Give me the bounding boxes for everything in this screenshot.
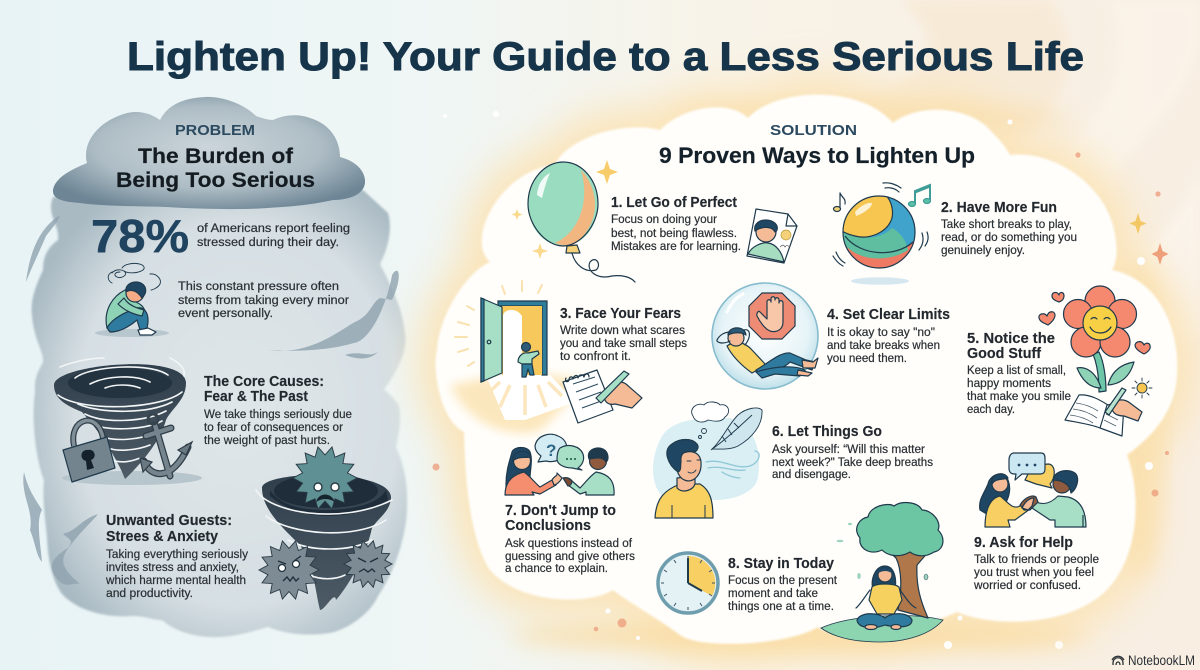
icon: two people talking: ? <box>546 441 556 460</box>
icon: man with thought bubble, feather and breeze <box>653 402 762 518</box>
icon: two people holding hands with speech bubbles <box>980 453 1086 527</box>
text: item 6 <box>772 424 933 481</box>
text: item 6: next week?" Take deep breaths <box>772 455 933 469</box>
text: item 7: a chance to explain. <box>505 561 608 575</box>
text: item 2: 2. Have More Fun <box>941 200 1057 216</box>
text: unwanted guests: Taking everything seriously <box>106 547 249 561</box>
text: item 8: Focus on the present <box>728 573 838 587</box>
text: americans stressed: of Americans report feeling <box>197 221 350 235</box>
text: item 3 <box>560 306 687 363</box>
text: item 5: 5. Notice the <box>967 331 1055 347</box>
text: item 6: 6. Let Things Go <box>772 424 882 440</box>
text: item 1 <box>611 195 741 253</box>
item 3: face your fears <box>450 281 687 434</box>
icon: balloon <box>512 160 635 282</box>
text: item 6: Ask yourself: “Will this matter <box>772 442 925 456</box>
cloud shape <box>436 95 1177 644</box>
text: item 1: Focus on doing your <box>611 212 717 226</box>
text: unwanted guests: Unwanted Guests: <box>106 513 232 529</box>
item 2: have more fun <box>833 183 1077 285</box>
text: americans stressed <box>197 221 350 249</box>
cloud body <box>32 190 407 637</box>
text: item 8: moment and take <box>728 586 818 600</box>
text: item 7: 7. Don't Jump to <box>505 503 616 519</box>
text: item 8: things one at a time. <box>728 599 834 613</box>
text: item 2: Take short breaks to play, <box>941 217 1072 231</box>
text: item 9: you trust when you feel <box>974 565 1094 579</box>
stat: 78 percent: 78% <box>91 210 189 262</box>
item 5: notice the good stuff <box>967 286 1152 436</box>
text: core causes: We take things seriously due <box>204 407 352 421</box>
heading: the burden of being too serious: Being Too Serious <box>116 168 315 192</box>
text: item 4 <box>827 307 950 365</box>
icon: smiling flower with hearts, sun and journal <box>1039 286 1152 436</box>
decorative dots and sparkles <box>432 111 1169 649</box>
item 7: don't jump to conclusions <box>505 434 635 575</box>
text: constant pressure <box>178 279 349 320</box>
text: constant pressure: stems from taking every minor <box>178 293 349 307</box>
text: item 2: read, or do something you <box>941 230 1077 244</box>
text: item 7: guessing and give others <box>505 549 635 563</box>
icon: imperfect portrait <box>747 209 797 263</box>
text: item 5: that make you smile <box>967 389 1071 403</box>
text: item 3: you and take small steps <box>560 336 687 350</box>
text: item 2: genuinely enjoy. <box>941 243 1025 257</box>
text: item 3: to confront it. <box>560 349 631 363</box>
icon: open door with light <box>450 281 590 434</box>
text: item 9: worried or confused. <box>973 578 1081 592</box>
text: item 3: 3. Face Your Fears <box>560 306 681 322</box>
text: item 5 <box>967 331 1071 416</box>
text: item 4: It is okay to say "no" <box>827 325 935 339</box>
icon: stressed person <box>95 263 169 337</box>
icon: tornado with lock and anchor <box>54 358 202 485</box>
smoke wisps <box>23 215 399 585</box>
text: constant pressure: This constant pressure often <box>178 279 339 293</box>
label: solution: SOLUTION <box>770 122 857 139</box>
text: item 7: Conclusions <box>505 518 591 534</box>
icon: notepad and pen <box>563 370 642 423</box>
heading: the burden of being too serious: The Burden of <box>138 144 294 168</box>
text: core causes: The Core Causes: <box>204 374 324 390</box>
text: item 5: Good Stuff <box>967 346 1041 362</box>
title: Lighten Up! Your Guide to a Less Serious Life <box>127 35 1084 79</box>
text: constant pressure: event personally. <box>178 306 273 320</box>
text: unwanted guests: which harme mental health <box>105 573 246 587</box>
text: item 8: 8. Stay in Today <box>728 556 834 572</box>
icon: bubble with stop sign and relaxed person <box>712 283 818 389</box>
item 6: let things go <box>653 402 933 518</box>
text: unwanted guests: invites stress and anxiety, <box>106 560 239 574</box>
cloud glow <box>436 95 1177 652</box>
text: item 3: Write down what scares <box>560 323 685 337</box>
text: item 9: 9. Ask for Help <box>974 535 1073 551</box>
text: core causes: the weight of past hurts. <box>204 433 330 447</box>
text: item 7: Ask questions instead of <box>505 536 633 550</box>
text: item 1: best, not being flawless. <box>611 226 737 240</box>
text: item 5: Keep a list of small, <box>967 363 1066 377</box>
text: item 5: happy moments <box>967 376 1051 390</box>
heading: the burden of being too serious <box>116 144 315 192</box>
panel: solution cloud <box>432 95 1177 652</box>
icon: person meditating under a tree <box>821 503 943 642</box>
item 9: ask for help <box>973 453 1099 592</box>
text: item 6: and disengage. <box>772 467 851 481</box>
text: item 9 <box>973 535 1099 592</box>
icon: clock <box>658 553 718 613</box>
text: item 9: Talk to friends or people <box>974 552 1099 566</box>
text: item 2 <box>941 200 1077 257</box>
label: problem: PROBLEM <box>175 122 255 139</box>
text: unwanted guests <box>105 513 249 600</box>
text: item 8 <box>728 556 838 613</box>
heading: 9 proven ways: 9 Proven Ways to Lighten Up <box>659 143 975 168</box>
header cloud <box>53 97 365 209</box>
icon: two people talking <box>505 434 614 495</box>
text: item 4: and take breaks when <box>827 338 940 352</box>
item 8: stay in today <box>658 503 943 642</box>
text: core causes <box>204 374 352 447</box>
text: unwanted guests: and productivity. <box>106 586 193 600</box>
item 1: let go of perfect <box>512 160 797 282</box>
text: core causes: Fear & The Past <box>204 389 308 405</box>
text: item 4: you need them. <box>827 351 907 365</box>
text: item 1: Mistakes are for learning. <box>611 239 741 253</box>
icon: bouncing ball with music notes <box>833 183 930 285</box>
item 4: set clear limits <box>712 283 950 389</box>
text: item 1: 1. Let Go of Perfect <box>611 195 737 211</box>
panel: problem storm cloud <box>23 97 407 637</box>
text: item 7 <box>505 503 635 575</box>
text: core causes: to fear of consequences or <box>204 420 343 434</box>
text: unwanted guests: Strees & Anxiety <box>106 529 218 545</box>
text: americans stressed: stressed during their day. <box>197 235 339 249</box>
text: item 4: 4. Set Clear Limits <box>827 307 950 323</box>
text: item 5: each day. <box>967 402 1015 416</box>
icon: tornado with stress monsters <box>256 447 392 610</box>
